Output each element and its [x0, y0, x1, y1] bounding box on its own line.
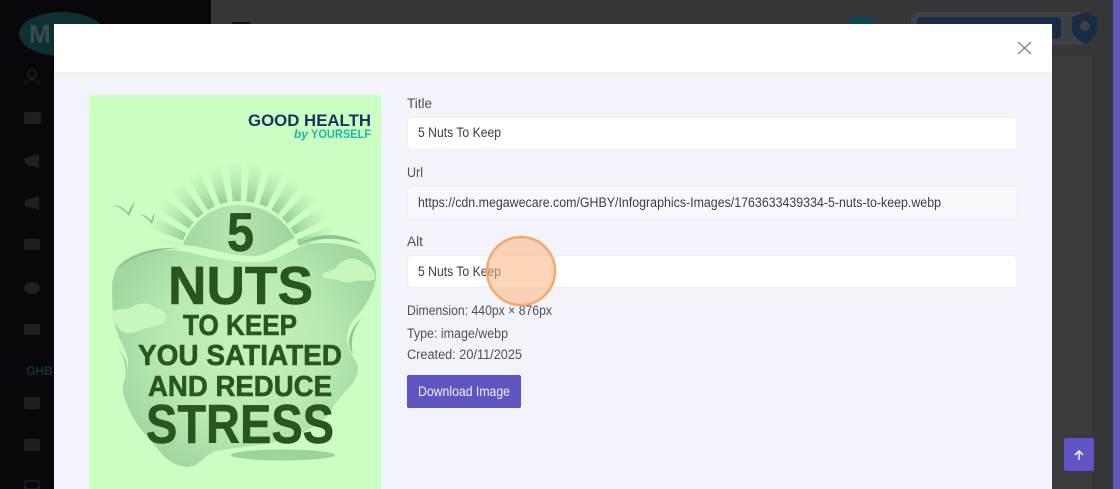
download button [407, 375, 521, 408]
clouds [112, 304, 166, 333]
image metadata: Created: 20/11/2025 [407, 347, 522, 362]
arc accents [116, 235, 362, 376]
headline: NUTS [168, 256, 313, 316]
modal header [54, 24, 1052, 72]
headline: 5 [227, 201, 254, 263]
brand logo: GOOD HEALTH [248, 111, 371, 130]
form: url field: Url [407, 165, 423, 180]
image metadata [407, 303, 552, 362]
headline [138, 201, 342, 455]
brand logo [248, 111, 371, 141]
form: title field: Title [407, 96, 432, 111]
form: title field [407, 96, 1017, 150]
headline: AND REDUCE [148, 371, 332, 403]
sun dome [183, 205, 295, 256]
headline: STRESS [146, 393, 334, 455]
sun rays [152, 169, 329, 246]
logo [19, 12, 105, 56]
back to top button [1064, 438, 1094, 471]
ground shadow [231, 450, 335, 460]
infographic image [89, 95, 381, 489]
brand logo: YOURSELF [311, 127, 371, 141]
sidebar section label: GHBY [26, 364, 61, 378]
brand logo: by [294, 127, 309, 141]
form: alt field: Alt [407, 234, 423, 249]
cloud blob [112, 243, 376, 467]
form: url field: https://cdn.megawecare.com/GHBY/Infographics-Images/1763633439334-5-nuts-to-keep.webp [418, 195, 941, 210]
download button: Download Image [418, 384, 510, 399]
click highlight [487, 237, 555, 305]
headline: YOU SATIATED [138, 340, 342, 372]
form: alt field [407, 234, 1017, 288]
image metadata: Type: image/webp [407, 326, 508, 341]
icon: close [1018, 42, 1031, 54]
icon: birds [113, 202, 155, 224]
form: alt field: 5 Nuts To Keep [418, 264, 501, 279]
image metadata: Dimension: 440px × 876px [407, 303, 552, 318]
headline: TO KEEP [183, 310, 297, 342]
sidebar icons [24, 70, 41, 489]
form: title field: 5 Nuts To Keep [418, 125, 501, 140]
sidebar [0, 0, 211, 489]
form: url field [407, 165, 1017, 218]
sidebar: M [29, 19, 51, 49]
